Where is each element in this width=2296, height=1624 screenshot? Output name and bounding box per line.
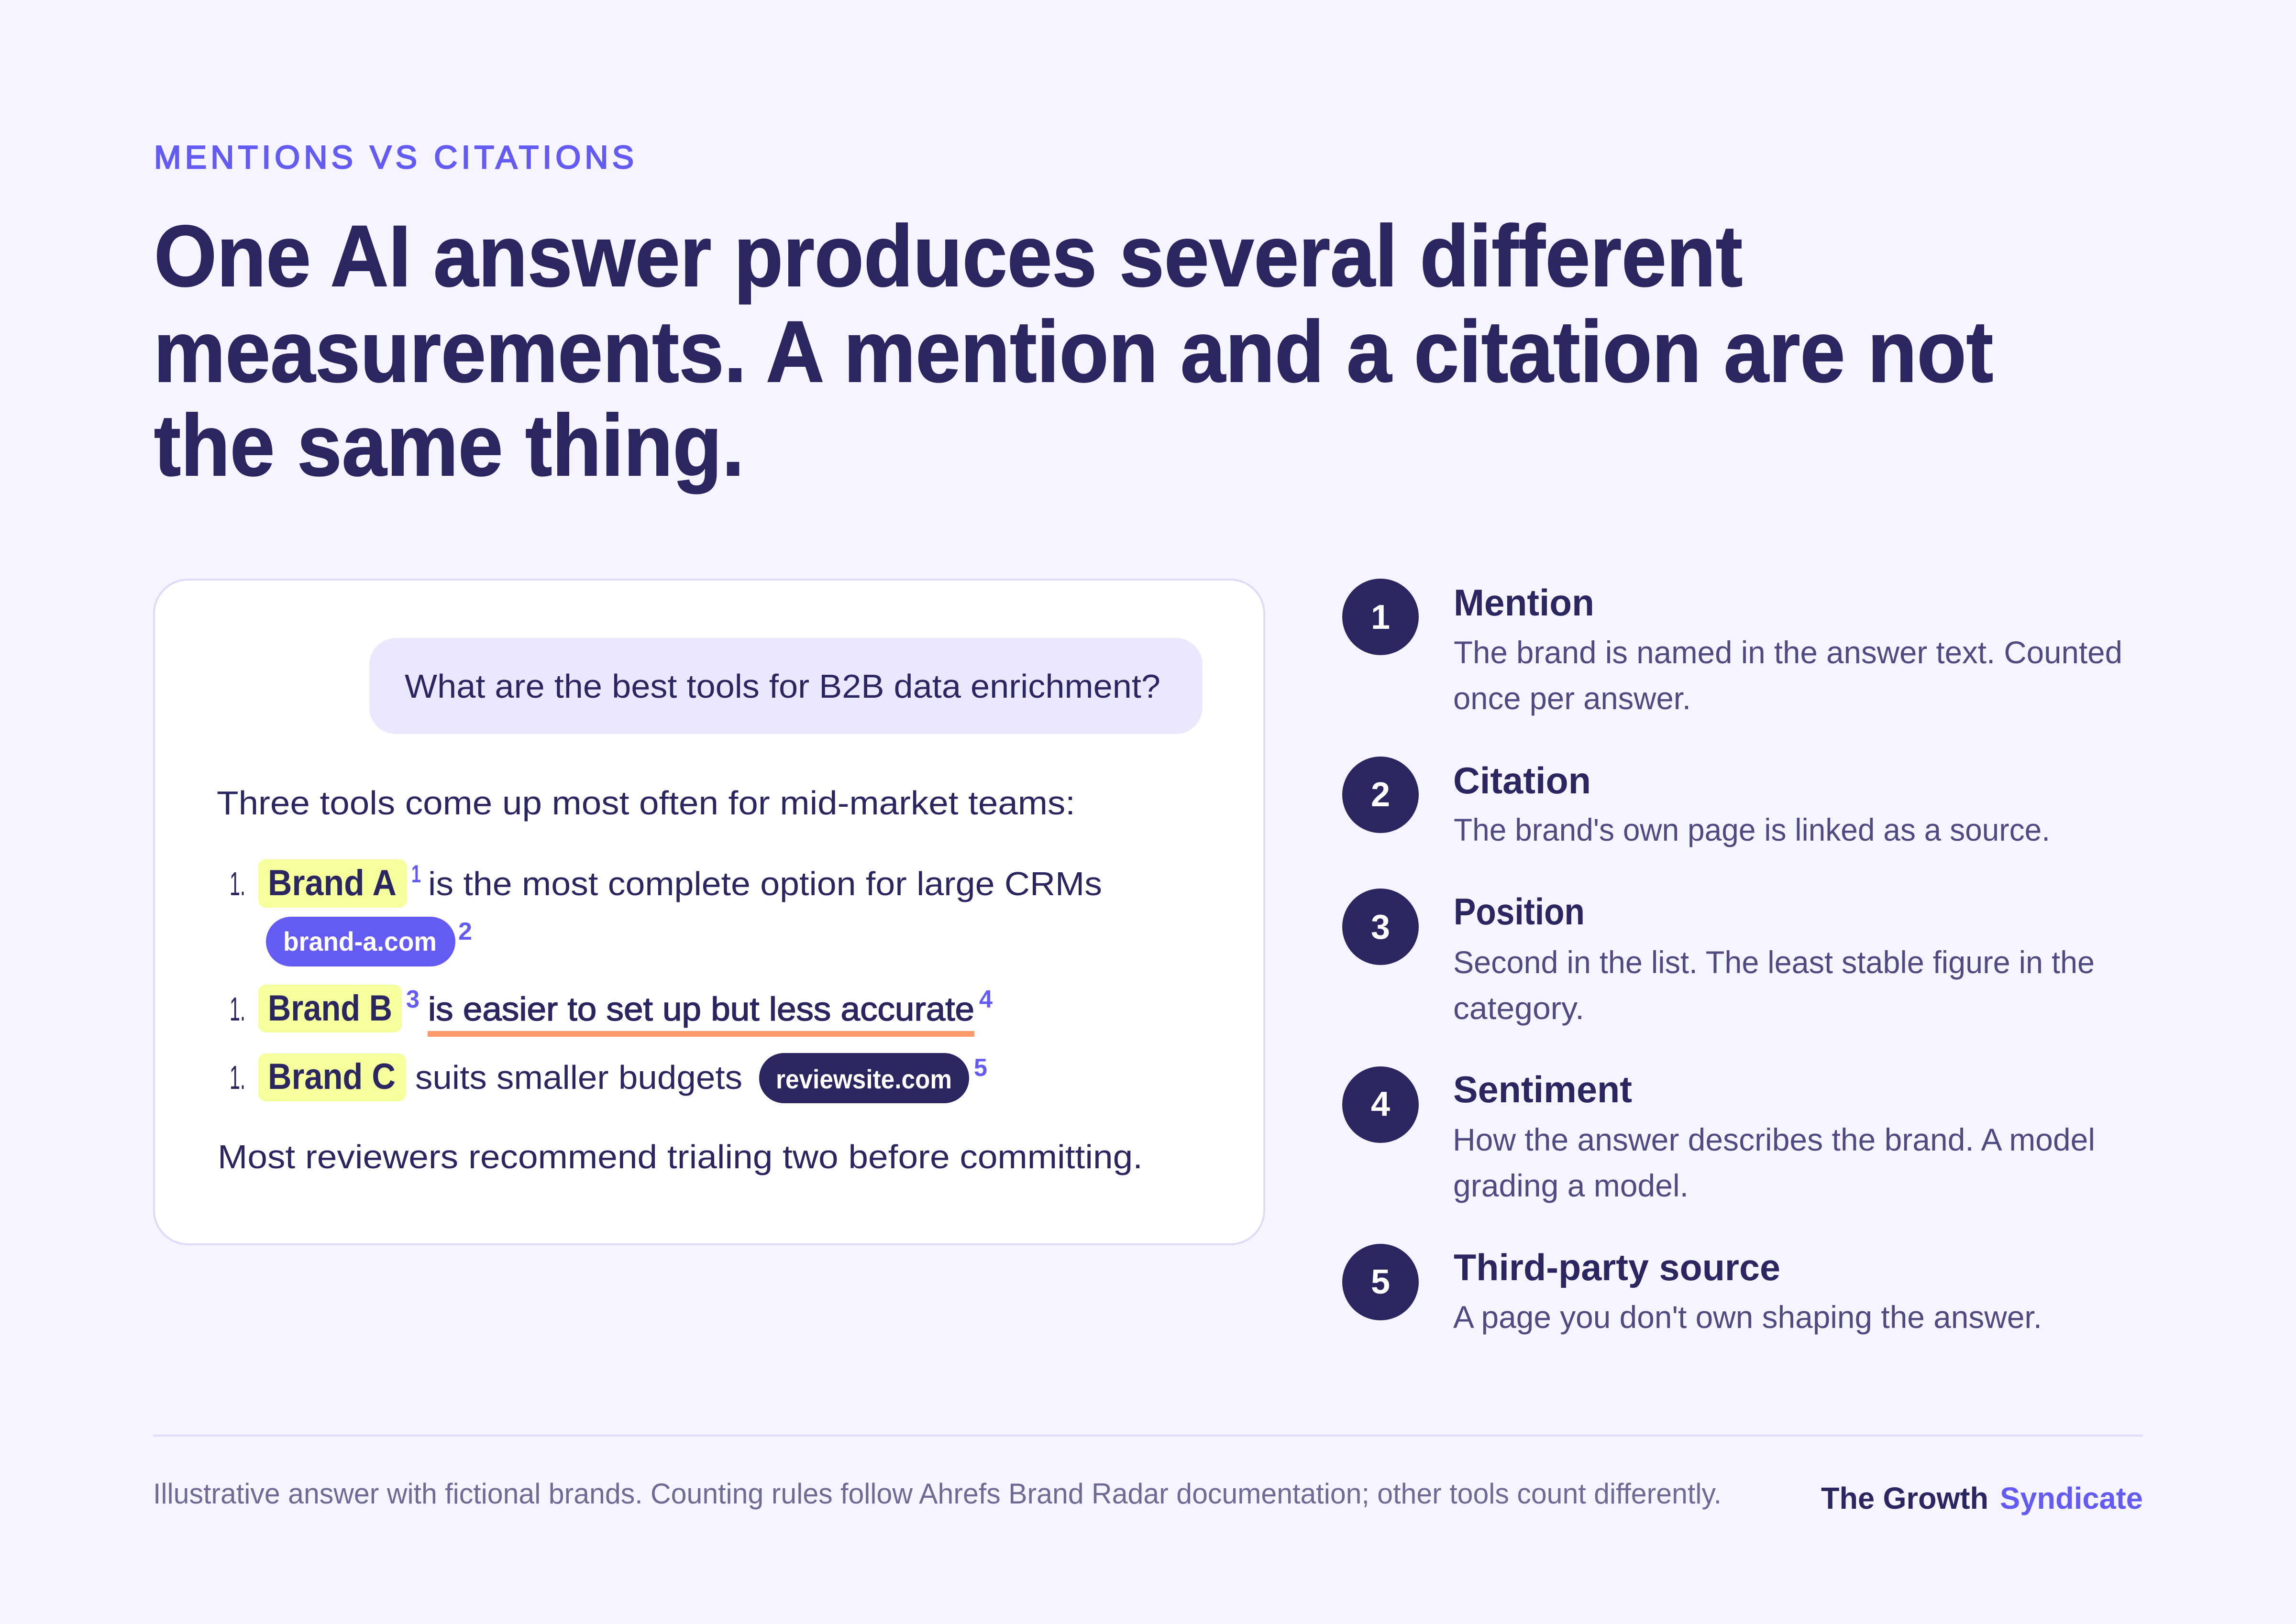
sentiment underline xyxy=(428,1031,974,1037)
list item: Brand A: 2 xyxy=(458,918,472,945)
list item: Brand C xyxy=(230,1053,987,1103)
legend item 4: Sentiment: How the answer describes the brand. A model xyxy=(1453,1122,2095,1157)
list item: Brand A: 1. xyxy=(230,865,245,902)
legend item 5: Third-party source xyxy=(1342,1244,2042,1335)
legend item 5: Third-party source: Third-party source xyxy=(1454,1246,1780,1288)
legend item 5: Third-party source: A page you don't own shaping the answer. xyxy=(1453,1299,2042,1335)
legend item 4: Sentiment: grading a model. xyxy=(1453,1168,1689,1203)
list item: Brand B: 4 xyxy=(979,986,993,1013)
citation pill: brand-a.com: brand-a.com xyxy=(283,926,437,956)
legend item 4: Sentiment xyxy=(1342,1066,2095,1203)
legend item 2: Citation: The brand's own page is linked as a source. xyxy=(1454,812,2050,847)
list item: Brand A xyxy=(230,859,1102,966)
brand signature: The Growth xyxy=(1821,1481,1988,1515)
list item: Brand B: 1. xyxy=(230,990,245,1028)
legend item 2: Citation: 2 xyxy=(1371,776,1390,814)
title: measurements. A mention and a citation are not xyxy=(154,303,1993,400)
legend item 3: Position: 3 xyxy=(1371,908,1390,946)
list item: Brand A: 1 xyxy=(411,860,421,888)
legend item 3: Position: Second in the list. The least stable figure in the xyxy=(1453,944,2095,980)
list item: Brand B xyxy=(230,985,993,1037)
list item: Brand A: is the most complete option for large CRMs xyxy=(428,865,1102,902)
list item: Brand C: 5 xyxy=(974,1054,987,1082)
footnote: Illustrative answer with fictional brands. Counting rules follow Ahrefs Brand Radar documentation; other tools count differently. xyxy=(153,1478,1722,1510)
list item: Brand C: suits smaller budgets xyxy=(415,1059,742,1096)
citation pill: brand-a.com xyxy=(266,917,455,966)
question bubble xyxy=(369,638,1203,734)
answer closing text: Most reviewers recommend trialing two before committing. xyxy=(218,1138,1143,1175)
legend item 3: Position: Position xyxy=(1454,890,1585,933)
panel: AI answer card xyxy=(154,580,1264,1244)
legend item 2: Citation xyxy=(1342,757,2050,847)
legend item 3: Position xyxy=(1342,889,2095,1026)
legend item 1: Mention xyxy=(1342,579,2122,716)
citation pill: reviewsite.com xyxy=(759,1053,969,1103)
question bubble: What are the best tools for B2B data enrichment? xyxy=(405,668,1160,705)
brand A highlight: Brand A xyxy=(268,863,397,903)
legend item 4: Sentiment: 4 xyxy=(1371,1085,1390,1123)
list item: Brand C: 1. xyxy=(230,1059,245,1096)
brand signature: Syndicate xyxy=(2000,1481,2143,1515)
legend item 5: Third-party source: 5 xyxy=(1371,1263,1390,1301)
legend item 2: Citation: Citation xyxy=(1453,759,1591,801)
list item: Brand B: 3 xyxy=(406,986,419,1013)
list item: Brand B: is easier to set up but less accurate xyxy=(428,990,974,1028)
title xyxy=(154,207,1993,494)
title: One AI answer produces several different xyxy=(154,207,1743,305)
brand B highlight: Brand B xyxy=(268,988,392,1029)
legend item 4: Sentiment: Sentiment xyxy=(1453,1068,1632,1110)
brand C highlight: Brand C xyxy=(268,1056,396,1097)
legend item 1: Mention: 1 xyxy=(1371,598,1390,636)
legend item 1: Mention: The brand is named in the answer text. Counted xyxy=(1454,635,2122,670)
legend item 3: Position: category. xyxy=(1453,990,1584,1026)
answer intro text: Three tools come up most often for mid-market teams: xyxy=(217,784,1075,822)
eyebrow label: MENTIONS VS CITATIONS xyxy=(154,139,634,176)
legend item 1: Mention: once per answer. xyxy=(1453,680,1691,716)
legend item 1: Mention: Mention xyxy=(1454,582,1594,624)
title: the same thing. xyxy=(154,396,744,494)
citation pill: reviewsite.com: reviewsite.com xyxy=(776,1064,952,1094)
brand signature xyxy=(1821,1481,2143,1515)
